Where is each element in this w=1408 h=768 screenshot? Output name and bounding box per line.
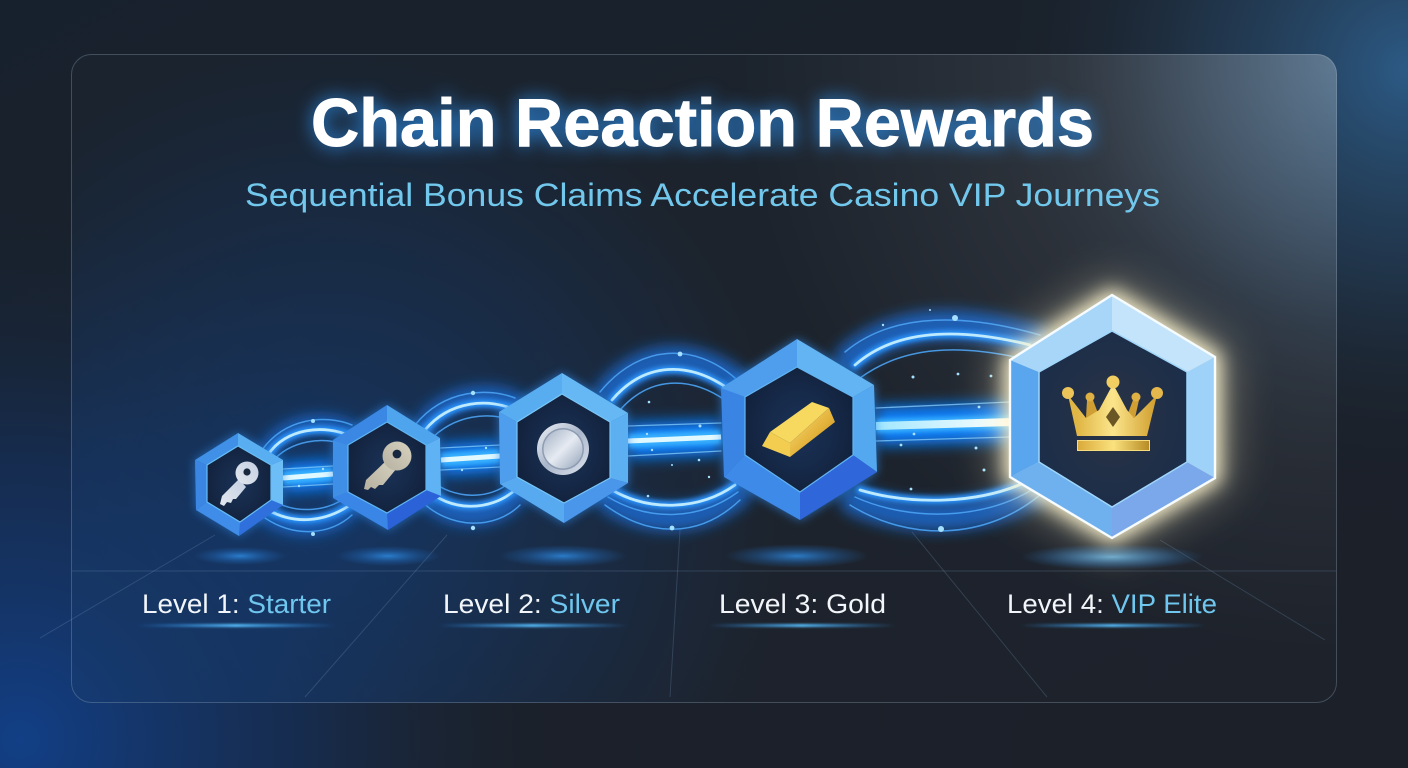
hexagon badge: level 2 silver [499,373,628,523]
blue haze band [268,325,1035,527]
label: level 4 VIP elite: Level 4: VIP Elite [1007,589,1217,619]
icon: gold bar [762,402,835,457]
icon: gold crown [1062,376,1163,450]
hexagon badge: level 3 gold [721,339,877,520]
bright arcs [268,334,1030,520]
label: level 3 gold: Level 3: Gold [719,589,886,619]
label: level 3 gold [708,589,896,627]
beam core [283,437,721,478]
hexagon badge: level 1 starter [195,433,283,536]
floor grid lines [40,530,1336,697]
hexagon badge: level 4 VIP elite [1010,295,1215,538]
pools of light under hexagons [194,544,1204,570]
icon: gold-tinted key [364,442,412,490]
icon: silver coin [537,423,589,475]
beam tight glow [283,422,1012,478]
beam wide glow [283,422,1012,478]
glass panel [71,54,1337,703]
icon: silver key [220,462,258,506]
energy chain: arcs and beams [262,320,1040,532]
spark particles [298,309,992,536]
title: Chain Reaction Rewards [311,85,1094,161]
subtitle: Sequential Bonus Claims Accelerate Casino VIP Journeys [245,177,1160,213]
side beams [283,402,1010,487]
faint secondary arcs [262,320,1040,532]
label: level 2 silver: Level 2: Silver [443,589,620,619]
arc glow halo [268,334,1030,520]
label: level 1 starter: Level 1: Starter [142,589,331,619]
hexagon badge: level 1 to 2 key [333,405,441,530]
